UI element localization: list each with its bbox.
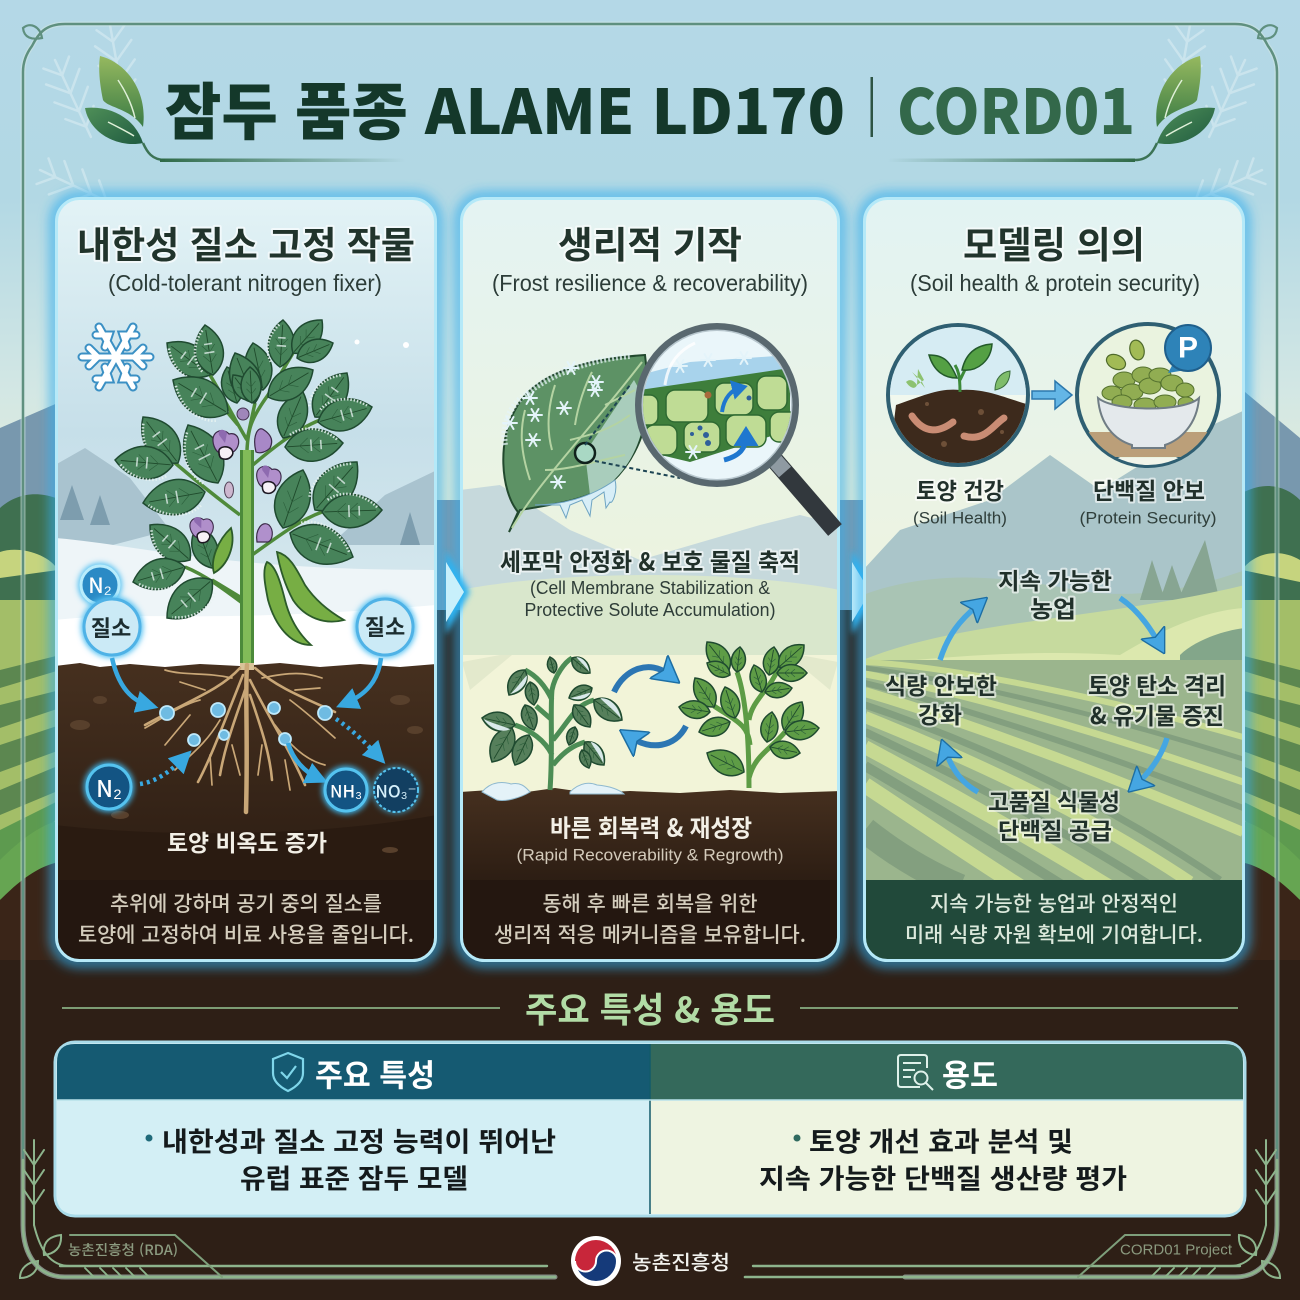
panel description: 추위에 강하며 공기 중의 질소를 bbox=[110, 888, 382, 918]
arrow: panel 2 to 3 bbox=[852, 550, 876, 635]
illustration: recovered plant bbox=[678, 636, 820, 788]
logo wordmark: 농촌진흥청 bbox=[632, 1246, 730, 1276]
title text main: 잠두 품종 ALAME LD170 bbox=[165, 62, 845, 152]
N2 soil bubble: N₂ bbox=[96, 770, 122, 804]
nitrogen label left bbox=[81, 596, 143, 658]
column body text: 토양 개선 효과 분석 및 bbox=[809, 1120, 1073, 1160]
cycle node: sustainable agriculture bbox=[998, 562, 1112, 624]
nitrogen label right: 질소 bbox=[365, 610, 405, 642]
panel description bbox=[905, 888, 1203, 949]
cycle node: plant protein bbox=[988, 783, 1120, 846]
illustration: roots bbox=[145, 665, 335, 812]
mechanism subtitle 1: Protective Solute Accumulation) bbox=[524, 600, 776, 620]
mechanism heading 2: 바른 회복력 & 재성장 bbox=[550, 808, 752, 844]
cycle node: carbon sequestration: 토양 탄소 격리 bbox=[1088, 667, 1226, 701]
column heading: 용도 bbox=[942, 1050, 998, 1096]
mechanism subtitle 2: (Rapid Recoverability & Regrowth) bbox=[516, 846, 784, 864]
footer bbox=[68, 1236, 1233, 1286]
nitrogen label left: 질소 bbox=[91, 611, 131, 643]
table column: key traits bbox=[57, 1044, 650, 1214]
cycle node: sustainable agriculture: 농업 bbox=[1030, 590, 1076, 624]
logo: government taegeuk bbox=[571, 1236, 621, 1286]
panel: modelling significance bbox=[863, 197, 1245, 962]
cycle node: carbon sequestration: & 유기물 증진 bbox=[1090, 697, 1224, 731]
title bbox=[85, 56, 1215, 162]
label: protein security bbox=[1080, 472, 1216, 528]
soil fertility label: 토양 비옥도 증가 bbox=[167, 824, 327, 858]
cycle node: food security: 강화 bbox=[918, 696, 962, 730]
label: protein security: (Protein Security) bbox=[1080, 508, 1216, 528]
panel: physiological mechanism bbox=[460, 197, 840, 962]
illustration: frost-damaged plant bbox=[480, 653, 628, 801]
NO3 bubble bbox=[372, 766, 420, 814]
panel heading: 모델링 의의 bbox=[963, 215, 1145, 269]
label: soil health: (Soil Health) bbox=[913, 508, 1007, 528]
cycle node: food security bbox=[885, 667, 997, 730]
icon: shield bbox=[273, 1053, 303, 1091]
cycle node: plant protein: 단백질 공급 bbox=[998, 812, 1112, 846]
panel heading: 생리적 기작 bbox=[558, 215, 742, 269]
label: soil health: 토양 건강 bbox=[916, 472, 1004, 506]
section heading: key traits and uses: 주요 특성 & 용도 bbox=[525, 982, 775, 1034]
table column: uses bbox=[650, 1044, 1243, 1214]
panel description bbox=[78, 888, 414, 949]
title text project: CORD01 bbox=[897, 62, 1135, 152]
title ornament: right leaves bbox=[887, 56, 1215, 162]
illustration: fava bean plant bbox=[114, 312, 383, 670]
arrow: panel 1 to 2 bbox=[446, 550, 470, 635]
zoom lines bbox=[585, 385, 680, 478]
frost pattern at corners bbox=[27, 14, 1273, 229]
mechanism subtitle 1 bbox=[524, 578, 776, 620]
nitrogen label right bbox=[354, 596, 416, 658]
cycle node: sustainable agriculture: 지속 가능한 bbox=[998, 562, 1112, 596]
title divider bbox=[870, 77, 873, 137]
NH3 bubble bbox=[322, 766, 370, 814]
icon: snowflake bbox=[82, 327, 150, 387]
panel subtitle: (Cold-tolerant nitrogen fixer) bbox=[108, 270, 382, 296]
column body text: 유럽 표준 잠두 모델 bbox=[240, 1158, 468, 1196]
illustration: frosted leaf bbox=[503, 355, 650, 532]
column body text bbox=[759, 1120, 1127, 1196]
sustainability cycle diagram bbox=[885, 562, 1226, 846]
mechanism subtitle 1: (Cell Membrane Stabilization & bbox=[530, 578, 770, 598]
pods bbox=[213, 528, 344, 645]
panel description bbox=[494, 888, 806, 949]
icon: protein badge bbox=[1165, 325, 1211, 373]
panel subtitle: (Frost resilience & recoverability) bbox=[492, 270, 808, 296]
arrows: recovery cycle bbox=[614, 667, 686, 745]
cycle node: carbon sequestration bbox=[1088, 667, 1226, 731]
panel heading: 내한성 질소 고정 작물 bbox=[77, 215, 415, 269]
icon: protein security bowl bbox=[1077, 324, 1219, 468]
label: soil health bbox=[913, 472, 1007, 528]
N2 bubble bbox=[78, 563, 122, 607]
icon: magnifier with leaf cells bbox=[630, 327, 835, 530]
panel description: 토양에 고정하여 비료 사용을 줄입니다. bbox=[78, 919, 414, 949]
cycle node: plant protein: 고품질 식물성 bbox=[988, 783, 1120, 817]
panel description: 지속 가능한 농업과 안정적인 bbox=[930, 888, 1178, 918]
column body text: 지속 가능한 단백질 생산량 평가 bbox=[759, 1158, 1127, 1196]
icon: protein badge: P bbox=[1178, 332, 1198, 364]
nitrogen nodules bbox=[160, 702, 332, 746]
panel description: 미래 식량 자원 확보에 기여합니다. bbox=[905, 919, 1203, 949]
icon: soil health bbox=[888, 325, 1030, 470]
column body text: 내한성과 질소 고정 능력이 뛰어난 bbox=[162, 1120, 556, 1160]
column body text bbox=[146, 1120, 556, 1196]
arrow: soil to protein bbox=[1032, 381, 1072, 409]
cycle node: food security: 식량 안보한 bbox=[885, 667, 997, 701]
mechanism heading 1: 세포막 안정화 & 보호 물질 축적 bbox=[500, 542, 800, 578]
panel subtitle: (Soil health & protein security) bbox=[910, 270, 1200, 296]
N2 soil bubble bbox=[84, 762, 134, 812]
cycle arrows bbox=[940, 598, 1167, 792]
icon: document search bbox=[898, 1055, 933, 1090]
NO3 bubble: NO₃⁻ bbox=[375, 778, 417, 802]
footer right label: CORD01 Project bbox=[1120, 1242, 1233, 1258]
panel description: 생리적 적응 메커니즘을 보유합니다. bbox=[494, 919, 806, 949]
N2 bubble: N₂ bbox=[88, 570, 112, 600]
table: traits and uses bbox=[55, 1042, 1245, 1216]
NH3 bubble: NH₃ bbox=[330, 778, 362, 802]
flowers bbox=[188, 408, 281, 544]
column heading: 주요 특성 bbox=[315, 1050, 435, 1096]
title ornament: left leaves bbox=[85, 56, 406, 162]
panel description: 동해 후 빠른 회복을 위한 bbox=[542, 888, 758, 918]
arrows: nitrogen into soil bbox=[112, 658, 381, 784]
label: protein security: 단백질 안보 bbox=[1093, 472, 1205, 506]
panel: cold-tolerant nitrogen fixer bbox=[55, 197, 437, 962]
footer left label: 농촌진흥청 (RDA) bbox=[68, 1240, 178, 1260]
